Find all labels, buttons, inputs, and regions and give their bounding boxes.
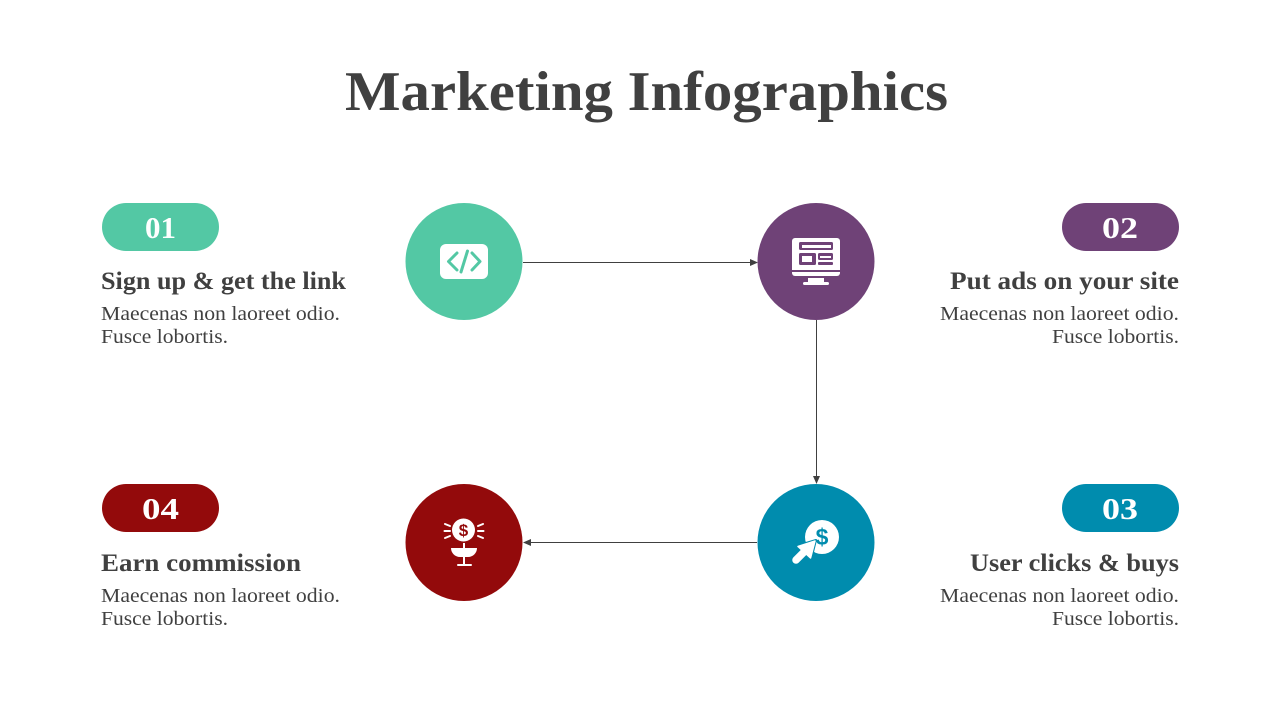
icon: code window on green circle [406, 203, 522, 320]
badge: 02: 02 [1102, 210, 1138, 245]
body: step 01: Fusce lobortis. [101, 326, 228, 348]
arrow: step 2 to step 3 [813, 320, 820, 484]
body: step 01: Maecenas non laoreet odio. [101, 303, 340, 325]
badge: 04: 04 [142, 491, 179, 526]
body: step 02 [940, 303, 1179, 348]
body: step 04 [101, 585, 340, 630]
icon: dollar plant on red circle: $ [459, 521, 469, 540]
badge: 04 [102, 484, 219, 532]
icon: dollar cursor on blue circle [758, 484, 874, 601]
heading: step 03: User clicks & buys [970, 550, 1179, 577]
body: step 02: Fusce lobortis. [1052, 326, 1179, 348]
badge: 01 [102, 203, 219, 251]
body: step 04: Maecenas non laoreet odio. [101, 585, 340, 607]
body: step 03 [940, 585, 1179, 630]
icon: monitor on purple circle [758, 203, 874, 320]
panel: step 04 text [101, 484, 340, 630]
icon: dollar plant on red circle [406, 484, 522, 601]
panel: step 02 text [940, 203, 1179, 348]
body: step 02: Maecenas non laoreet odio. [940, 303, 1179, 325]
icon: dollar cursor on blue circle: $ [816, 524, 829, 550]
badge: 01: 01 [145, 210, 176, 245]
body: step 04: Fusce lobortis. [101, 608, 228, 630]
heading: step 01: Sign up & get the link [101, 268, 346, 295]
body: step 01 [101, 303, 340, 348]
badge: 03: 03 [1102, 491, 1138, 526]
heading: step 02: Put ads on your site [950, 268, 1179, 295]
arrow: step 1 to step 2 [523, 259, 758, 266]
badge: 02 [1062, 203, 1179, 251]
title: Marketing Infographics [345, 61, 948, 123]
badge: 03 [1062, 484, 1179, 532]
body: step 03: Maecenas non laoreet odio. [940, 585, 1179, 607]
panel: step 01 text [101, 203, 346, 348]
panel: step 03 text [940, 484, 1179, 630]
arrow: step 3 to step 4 [523, 539, 757, 546]
body: step 03: Fusce lobortis. [1052, 608, 1179, 630]
heading: step 04: Earn commission [101, 550, 301, 577]
